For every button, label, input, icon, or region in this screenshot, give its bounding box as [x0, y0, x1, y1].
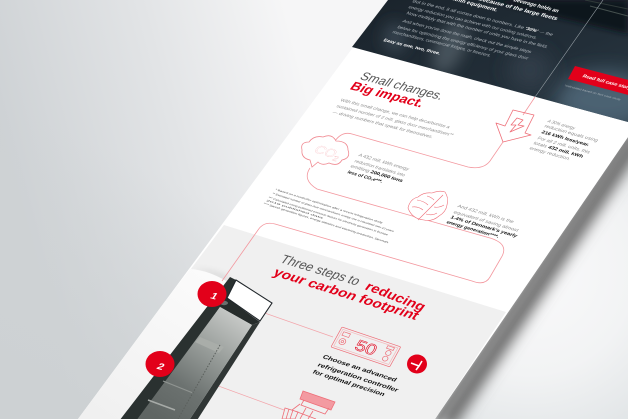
hero paragraph: below for optimizing the energy efficiency of your glass door: [396, 25, 530, 61]
panel: grey lower section: [70, 225, 506, 419]
heading: three steps: reducing: [362, 280, 429, 314]
icon: CO2 cloud: [302, 136, 349, 167]
text: Denmark energy comparison: 1.4% of Denmark's yearly: [449, 215, 519, 239]
text: CO2 reduction: A 432 mill. kWh energy: [357, 153, 411, 172]
hero paragraph: [382, 0, 555, 61]
step marker 1: 1: [208, 292, 220, 302]
hero paragraph: Easy as one, two, three.: [382, 38, 442, 56]
hero paragraph: energy reduction you can achieve with our cooling solutions.: [407, 5, 539, 41]
text: energy reduction: reduction equals using: [543, 124, 600, 143]
footnotes: **** Danish generation figures, energy statistics and electricity production, Denmark: [262, 202, 391, 244]
text: CO2 reduction: [346, 153, 411, 185]
step 1 text: Choose an advanced: [321, 354, 398, 383]
step marker 2: 2: [154, 362, 166, 373]
hero paragraph: And when you've done the math, check out the simple steps: [401, 19, 533, 55]
step marker 1: [198, 281, 226, 307]
panel: dark hero photo: [352, 0, 628, 128]
text: CO2 reduction: less of CO₂e***.: [346, 170, 384, 185]
text: energy reduction: A 30% energy: [546, 119, 577, 131]
footnotes: ** Estimated number of glass door merchandisers; energy use is calculated over 10 years: [271, 192, 396, 233]
heading: three steps: Three steps to: [277, 253, 364, 288]
icon: monstera leaf: [408, 191, 448, 220]
text: energy reduction: energy reduction.: [528, 146, 572, 162]
step 1 text: [311, 354, 400, 398]
connector line through hero: [535, 0, 603, 97]
hero paragraph: But in the end, it all comes down to numbers. Like '30%' — the: [411, 0, 555, 38]
heading: three steps: your carbon footprint: [270, 265, 423, 322]
text: energy reduction: 216 kWh less/year.: [540, 130, 591, 148]
text: energy reduction: [528, 119, 600, 162]
text: energy reduction: For all 2 mill. units, this: [536, 136, 592, 155]
button: read full case story: [568, 66, 628, 98]
text: Denmark energy comparison: equivalent of saving almost: [452, 210, 520, 233]
icon: CO2 cloud: CO: [311, 143, 340, 160]
fridge illustration: [116, 277, 272, 419]
step marker 2: [146, 351, 174, 377]
intro text: With this small change, we can help decarbonise a: [339, 98, 451, 130]
hero paragraph: merchandisers, commercial fridges, or freezers.: [391, 30, 492, 58]
footnotes: *** Calculated using published emission factors for electricity generation in Europe: [267, 196, 390, 236]
step 1 text: refrigeration controller: [316, 362, 400, 394]
text: Denmark energy comparison: energy generation****.: [445, 220, 501, 240]
red connector line: [222, 97, 535, 283]
hero heading: [446, 0, 560, 22]
heading: small changes big impact: Big impact.: [347, 80, 428, 110]
icon: refrigeration controller: 50: [352, 338, 380, 359]
text: CO2 reduction: emitting 200,000 tons: [349, 164, 404, 184]
footnotes: 2019 published data: [265, 199, 325, 220]
icon: CO2 cloud: 2: [330, 154, 341, 163]
text: energy reduction: totals 432 mill. kWh: [532, 141, 584, 159]
hero paragraph: Now multiply that with the number of units you have in the field.: [405, 11, 549, 50]
button caption: *calculated based on fact case study: [563, 84, 623, 101]
step 1 text: for optimal precision: [311, 369, 386, 398]
heading: small changes big impact: Small changes.: [357, 70, 447, 102]
icon: energy arrow with bolt: [496, 110, 534, 142]
text: Denmark energy comparison: [445, 204, 520, 240]
text: CO2 reduction: reduction translates into: [353, 159, 406, 178]
footnotes: * Based on a controller optimisation after a recent refrigeration study: [274, 188, 385, 225]
step number badge: [407, 354, 427, 374]
text: Denmark energy comparison: And 432 mill. kWh is the: [456, 204, 515, 225]
icon: refrigeration controller: [331, 327, 401, 367]
page shadow: [437, 137, 628, 419]
footnotes: [262, 188, 396, 244]
intro text: sustained number of 2 mill. glass door merchandisers**: [335, 104, 455, 138]
icon: fan motor unit: [282, 391, 335, 419]
intro text: — driving numbers that speak for themselves.: [331, 110, 434, 140]
lines from fridge to steps: [172, 299, 333, 410]
fridge frame: [116, 277, 236, 419]
